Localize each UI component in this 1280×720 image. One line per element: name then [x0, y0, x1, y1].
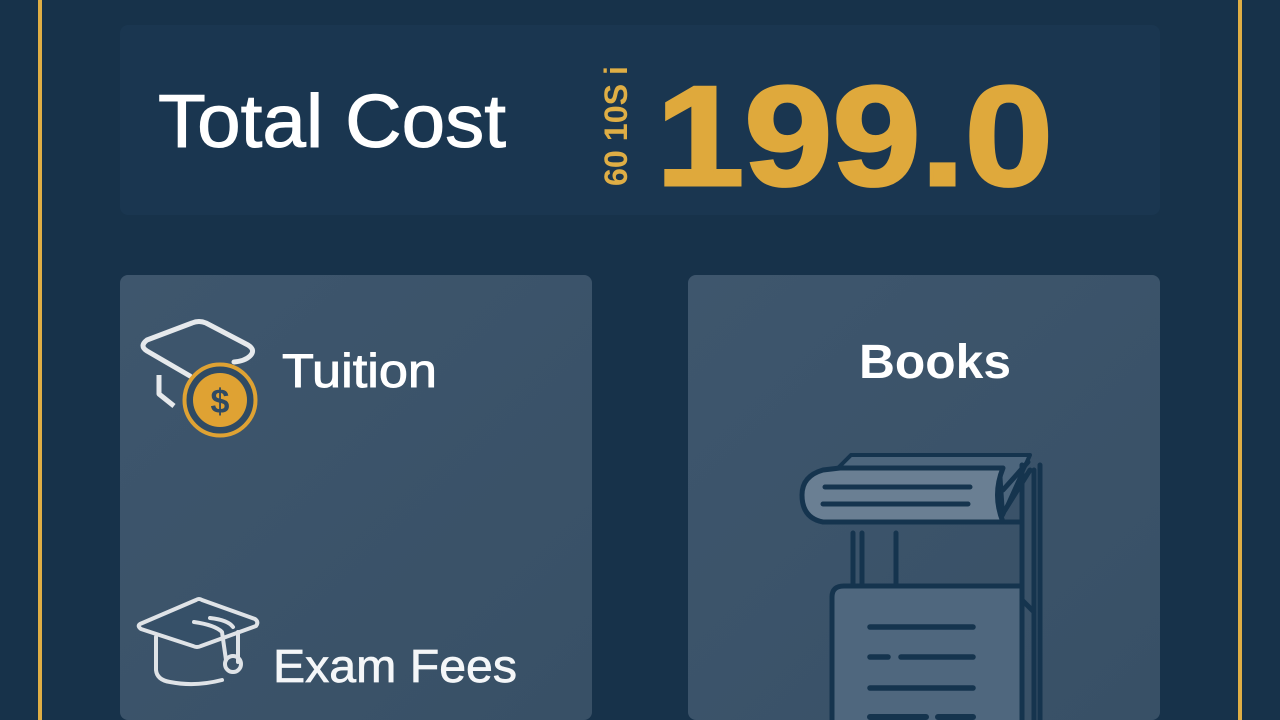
- icon: graduation cap: [139, 599, 257, 684]
- panel: total cost: [120, 25, 1160, 216]
- total amount: 199.0: [656, 57, 1053, 216]
- panel: books: [688, 275, 1160, 720]
- rotated small label: 60 10S i: [598, 66, 634, 186]
- icon: stack of books: [802, 455, 1040, 720]
- left gold border line: [38, 0, 42, 720]
- label: exam fees: Exam Fees: [273, 640, 517, 692]
- panel: tuition and exam fees: [120, 275, 592, 720]
- label: tuition: Tuition: [282, 344, 437, 397]
- heading: books: Books: [859, 336, 1011, 389]
- heading: total cost: Total Cost: [158, 79, 506, 163]
- right gold border line: [1238, 0, 1242, 720]
- icon: graduation cap with coin: $: [211, 383, 230, 421]
- icon: graduation cap with coin: [143, 322, 257, 437]
